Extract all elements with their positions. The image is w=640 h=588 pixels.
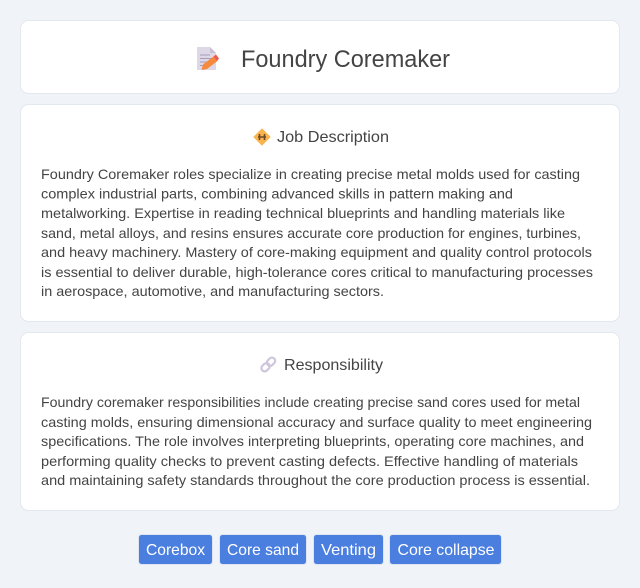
text block: responsibility: casting molds, ensuring dimensional accuracy and surface quality to meet engineering [41,414,592,430]
panel: responsibility [20,332,620,510]
text block: job description: in aerospace, automotive, and manufacturing sectors. [41,283,384,299]
tag: Venting [314,534,384,564]
text block: job description: metalworking. Expertise in reading technical blueprints and handling materials like [41,205,565,221]
tag: Core sand: Core sand [227,542,299,559]
tag: Core collapse: Core collapse [398,542,495,559]
text block: responsibility: Foundry coremaker responsibilities include creating precise sand cores used for metal [41,394,580,410]
icon: document with pencil [197,47,219,70]
tag: Corebox: Corebox [146,542,205,559]
text block: responsibility [41,394,592,488]
tag: Core sand [220,534,306,564]
tag: Venting: Venting [321,542,376,559]
heading: responsibility: Responsibility [284,357,383,374]
panel: title card [20,20,620,94]
icon: diamond sign [254,129,270,145]
text block: responsibility: performing quality checks to prevent casting defects. Effective handling of materials [41,453,578,469]
text block: job description: complex industrial parts, combining advanced skills in pattern making and [41,186,513,202]
tag: Core collapse [390,534,502,564]
text block: job description: Foundry Coremaker roles specialize in creating precise metal molds used for casting [41,166,580,182]
heading: job description: Job Description [277,129,389,146]
panel: job description [20,104,620,322]
text block: job description [41,166,593,299]
tag: Corebox [138,534,212,564]
text block: job description: sand, metal alloys, and resins ensures accurate core production for engines, turbines, [41,225,581,241]
text block: job description: and heavy machinery. Mastery of core-making equipment and quality control protocols [41,244,592,260]
text block: responsibility: and maintaining safety standards throughout the core production process is essential. [41,472,590,488]
icon: chain link [260,356,277,373]
text block: responsibility: specifications. The role involves interpreting blueprints, operating core machines, and [41,433,584,449]
text block: job description: is essential to deliver durable, high-tolerance cores critical to manufacturing processes [41,264,593,280]
title: Foundry Coremaker [241,46,450,73]
tag row [138,534,502,564]
